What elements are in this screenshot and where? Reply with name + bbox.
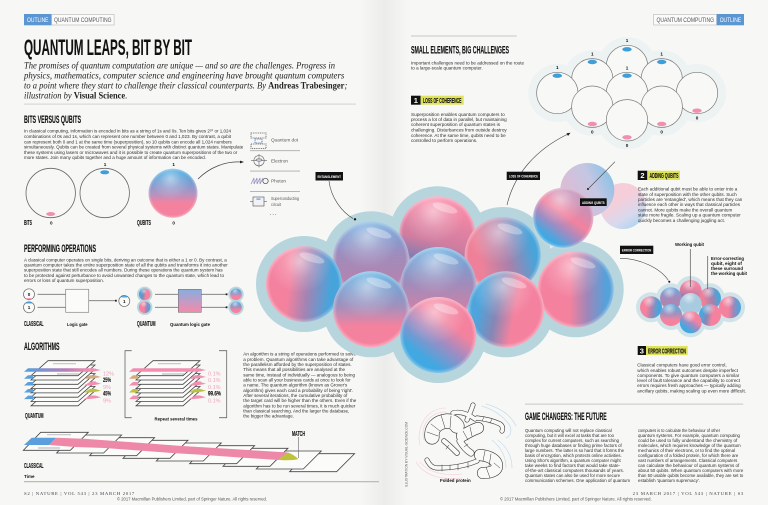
callout: entanglement: ENTANGLEMENT <box>318 174 341 179</box>
panel: algorithms <box>23 341 379 482</box>
label: match: MATCH <box>292 431 305 438</box>
column 2: molecules, which requires knowledge of the quantum <box>638 443 741 448</box>
icon: photon <box>251 178 268 184</box>
footer left: © 2017 Macmillan Publishers Limited, part of Springer Nature. All rights reserved. <box>117 496 267 502</box>
footer left: S2 | NATURE | VOL 543 | 23 MARCH 2017 <box>24 491 135 496</box>
repeated percentages: 0.1% <box>208 398 221 404</box>
folded protein illustration <box>416 404 516 479</box>
qubit sphere <box>148 162 198 226</box>
quantum stack of cards <box>24 361 101 406</box>
algorithm text: same time, instead of individually — analogous to being <box>243 372 355 377</box>
intro text: Important challenges need to be addressed on the route <box>411 60 524 65</box>
repeated percentages: 99.6% <box>208 392 222 398</box>
number badge 2 <box>638 171 680 180</box>
label: repeat several times: Repeat several times <box>154 416 198 422</box>
column 1: large numbers. The latter is so hard that it forms the <box>525 448 624 453</box>
repeated stack of cards <box>129 361 206 406</box>
arrow to qubit types <box>198 161 244 179</box>
label: folded protein: Folded protein <box>440 478 471 483</box>
number badge 1 <box>411 96 464 105</box>
section tag right <box>654 14 744 25</box>
qubit <box>266 246 342 322</box>
section tag left: QUANTUM COMPUTING <box>54 18 112 24</box>
label: logic gate: Logic gate <box>67 322 88 327</box>
quantum percentages: 25% <box>103 378 111 384</box>
label: bits: BITS <box>24 220 32 227</box>
body text: combinations of 0s and 1s, which can represent one number between 0 and 1,023. By contrast, a qubit <box>24 134 232 139</box>
label: working qubit: Working qubit <box>675 242 704 247</box>
qubit type list: circuit <box>271 202 282 207</box>
body text: In classical computing, information is encoded in bits as a string of 1s and 0s. Ten bits gives 2¹⁰ or 1,024 <box>24 129 231 134</box>
algorithm text: algorithm has to be run several times, it is much quicker <box>243 403 356 408</box>
state labels: 1 <box>556 65 559 70</box>
label: error-correcting qubit: these surround <box>711 266 743 271</box>
algorithm text: the bigger the advantage. <box>243 414 294 419</box>
label: quantum logic gate: Quantum logic gate <box>170 322 210 327</box>
standfirst: illustration by Visual Science. <box>24 92 127 102</box>
number badge 1: LOSS OF COHERENCE <box>423 98 462 105</box>
quantum percentages: 9% <box>103 385 111 391</box>
quantum percentages: 12% <box>103 372 114 378</box>
algorithm text: the parallelism afforded by the superposition of states. <box>243 362 352 367</box>
body text: Each additional qubit must be able to enter into a <box>638 187 738 192</box>
callout: adding qubits <box>580 162 615 206</box>
qubit type list: Electron <box>271 158 289 164</box>
segment lines <box>427 415 500 478</box>
qubit sphere: 1 <box>172 162 175 167</box>
panel: performing operations <box>24 243 244 328</box>
state labels: 0 <box>696 116 699 120</box>
body text <box>24 258 228 283</box>
body text: Classical computers have good error control, <box>637 363 727 368</box>
body text: more states. Join many qubits together and a huge amount of information can be encoded. <box>24 155 206 160</box>
qubit type list: Quantum dot <box>271 138 299 142</box>
classical logic gate diagram: 1 <box>28 305 31 310</box>
number badge 3: ERROR CORRECTION <box>648 348 686 355</box>
body text: simultaneously. Qubits can be created from several physical systems with distinct quantum states. Manipulate <box>24 145 244 150</box>
body text: these systems using lasers or microwaves and it is possible to create quantum superpositions of the two or <box>24 150 238 155</box>
column 1 <box>525 428 630 483</box>
algorithm text: a problem. Quantum algorithms can take advantage of <box>243 357 354 362</box>
section tag right: OUTLINE <box>720 18 741 24</box>
number badge 2: 2 <box>640 171 645 180</box>
body text: A classical computer operates on single bits, deriving an outcome that is either a 1 or 0. By contrast, a <box>24 258 227 262</box>
classical logic gate diagram: 0 <box>28 292 31 297</box>
state labels: 0 <box>626 143 629 148</box>
label: error-correcting qubit: the working qubit <box>711 271 747 276</box>
qubit <box>333 221 409 297</box>
number badge 3 <box>638 346 688 355</box>
label: error-correcting qubit: qubit, eight of <box>711 261 742 266</box>
label: error-correcting qubit: Error-correcting <box>711 256 744 261</box>
number badge 3: 3 <box>640 346 644 355</box>
body text: superposition state that still encodes all numbers. During these operations the quantum system has <box>24 268 223 273</box>
icon: quantum dot <box>251 133 266 148</box>
column 2: quantum systems. For example, quantum computing <box>638 433 740 438</box>
body text <box>24 129 244 160</box>
title: QUANTUM LEAPS, BIT BY BIT <box>24 35 192 60</box>
bit state 1 <box>80 162 129 218</box>
panel: bits versus qubits: BITS VERSUS QUBITS <box>24 114 81 126</box>
repeated percentages <box>208 372 222 404</box>
column 1: Using Shor's algorithm, a quantum computer might <box>525 458 621 463</box>
section tag right: QUANTUM COMPUTING <box>656 18 714 24</box>
qubit <box>538 251 614 327</box>
body text: challenging. Disturbances from outside destroy <box>411 128 507 133</box>
qubit type list: ... <box>270 211 277 216</box>
state labels: 0 <box>591 130 594 134</box>
bit state 1: 1 <box>104 162 107 167</box>
halo <box>636 276 745 337</box>
state labels: 1 <box>626 38 629 43</box>
body text: process a lot of data in parallel, but maintaining <box>411 117 507 122</box>
body text <box>638 187 743 223</box>
classical logic gate diagram: 1 <box>123 299 126 304</box>
standfirst <box>23 60 347 102</box>
footer right: 23 MARCH 2017 | VOL 543 | NATURE | S3 <box>633 491 744 496</box>
body text: state of superposition with the other qubits. Such <box>638 192 737 197</box>
central qubit cluster <box>256 163 646 383</box>
repeated percentages: 0.1% <box>208 378 221 384</box>
column 2: about 50 qubits. When quantum computers with more <box>638 468 744 473</box>
panel: performing operations: CLASSICAL <box>24 321 44 328</box>
body text: influence each other in ways that classical particles <box>638 202 741 207</box>
column 1: complex for current computers, such as searching <box>525 438 619 443</box>
footer right <box>500 491 744 502</box>
algorithm text: a name. The quantum algorithm (known as Grover's <box>243 383 348 388</box>
qubit <box>465 217 541 293</box>
label: quantum: QUANTUM <box>137 321 156 328</box>
qubit type list: Photon <box>271 178 287 184</box>
column 2: mechanics of their electrons, or to find the optimal <box>638 448 735 453</box>
quantum percentages: 9% <box>103 398 111 404</box>
column 1: through huge databases or finding prime factors of <box>525 443 622 448</box>
mini qubits <box>640 280 741 333</box>
label: error-correcting qubit <box>711 256 747 276</box>
body text: coherent superposition of quantum states is <box>411 122 501 127</box>
backbone outer <box>427 405 503 473</box>
body text: state more fragile. Scaling up a quantum computer <box>638 213 741 218</box>
body text: ancillary qubits, making scaling up even more difficult. <box>637 388 746 393</box>
column 2: than 50 usable qubits become available, they are set to <box>638 473 744 478</box>
algorithm text: able to scan all your business cards at once to look for <box>243 378 351 382</box>
repeated percentages: 0.1% <box>208 385 221 391</box>
body text: particles are 'entangled', which means that they can <box>638 197 743 202</box>
qubit type list <box>250 133 300 216</box>
panel: adding qubits <box>638 171 743 223</box>
panel: loss of coherence <box>411 96 507 143</box>
number badge 1: 1 <box>414 96 418 105</box>
label: qubits: QUBITS <box>137 220 151 227</box>
state labels: 1 <box>626 66 629 70</box>
classical search strip <box>23 432 355 472</box>
qubit <box>399 196 475 272</box>
ghost outlines <box>416 404 516 479</box>
quantum percentages <box>103 372 114 404</box>
halo <box>256 186 624 383</box>
faded qubits <box>560 163 646 229</box>
backbone inner <box>427 405 503 473</box>
body text: cannot. More qubits make the overall quantum <box>638 207 732 212</box>
algorithm text: algorithm) gives each card a probability of being 'right'. <box>243 388 353 393</box>
state labels <box>556 38 699 148</box>
standfirst: physics, mathematics, computer science and engineering have brought quantum computers <box>23 72 345 82</box>
panel: game changers <box>525 404 744 483</box>
qubit sphere: 0 <box>172 220 175 226</box>
footer right: © 2017 Macmillan Publishers Limited, part of Springer Nature. All rights reserved. <box>500 496 652 502</box>
column 2: can calculate the behaviour of quantum systems of <box>638 463 740 468</box>
column 2: computers is to calculate the behaviour of other <box>638 428 720 433</box>
column 1: Quantum states can also be used for more secure <box>525 473 620 478</box>
body text: Superposition enables quantum computers to <box>411 112 505 117</box>
footer left <box>24 491 267 502</box>
qubit type list: Superconducting <box>271 196 299 201</box>
column 2: configuration of a folded protein, for which there are <box>638 453 739 458</box>
qubit circles <box>537 45 718 141</box>
callout: entanglement <box>316 172 356 220</box>
algorithm text: An algorithm is a string of operations performed to solve <box>243 352 356 357</box>
algorithm text <box>243 352 357 419</box>
body text: errors requires fresh approaches — typically adding <box>637 383 741 388</box>
callout: loss of coherence: LOSS OF COHERENCE <box>509 174 538 179</box>
body text: to be protected against perturbance to avoid unwanted changes to the quantum state, which lead to <box>24 273 224 278</box>
panel: small elements intro: SMALL ELEMENTS, BIG CHALLENGES <box>411 44 509 56</box>
qubit <box>333 271 409 347</box>
panel: performing operations: PERFORMING OPERATIONS <box>24 243 96 255</box>
bracket: repeat <box>125 351 227 418</box>
state labels: 0 <box>660 130 663 134</box>
qubit <box>468 271 544 347</box>
body text: components. To give quantum computers a similar <box>637 373 740 378</box>
qubit <box>400 247 476 323</box>
body text: controlled to perform operations. <box>411 138 477 143</box>
column 1: computing, but it will excel at tasks that are too <box>525 433 614 438</box>
panel: small elements intro <box>411 36 524 70</box>
body text: quickly becomes a challenging juggling act. <box>638 218 725 223</box>
state labels: 1 <box>591 52 594 56</box>
body text <box>637 363 746 393</box>
section tag left <box>24 14 114 25</box>
callout: adding qubits: ADDING QUBITS <box>582 200 605 205</box>
callout: error correction <box>620 246 670 283</box>
callout: loss of coherence <box>507 133 570 205</box>
algorithm text: This means that all possibilities are analysed at the <box>243 367 345 372</box>
standfirst: The promises of quantum computation are unique — and so are the challenges. Progress in <box>24 60 335 72</box>
section tag left: OUTLINE <box>27 18 48 24</box>
number badge 2: ADDING QUBITS <box>650 173 679 180</box>
column 1: basis of encryption, which protects online activities. <box>525 453 622 458</box>
callout: error correction: ERROR CORRECTION <box>622 248 651 253</box>
body text: errors or loss of quantum superposition. <box>24 278 104 283</box>
label: time: Time <box>24 474 35 479</box>
panel: bits versus qubits <box>24 114 300 227</box>
intro text: to a large-scale quantum computer. <box>411 65 483 70</box>
illustration credit: ILLUSTRATION BY VISUAL-SCIENCE.COM <box>404 422 408 487</box>
body text: can represent both 0 and 1 at the same time (superposition), so 10 qubits can encode all 1,024 numbers <box>24 139 232 144</box>
column 2: establish 'quantum supremacy'. <box>638 478 700 483</box>
column 1: take weeks to find factors that would take state- <box>525 463 620 468</box>
qubit array diagram <box>528 37 726 149</box>
panel: error correction <box>637 346 746 393</box>
panel: algorithms: ALGORITHMS <box>24 341 60 353</box>
body text: coherence. At the same time, qubits need to be <box>411 133 506 138</box>
icon: superconducting circuit <box>250 197 267 206</box>
column 1: communication schemes. One application of quantum <box>525 478 630 483</box>
column 1: of-the-art classical computers thousands of years. <box>525 468 624 473</box>
quantum logic gate diagram <box>137 287 244 315</box>
qubit <box>400 297 476 373</box>
panel: algorithms: CLASSICAL <box>24 463 44 470</box>
bit state 0: 0 <box>50 220 53 226</box>
body text: quantum computer takes the entire superposition state of all the qubits and transforms it into another <box>24 263 228 268</box>
body text: level of fault tolerance and the capability to correct <box>637 378 741 383</box>
algorithm text: than classical searching. And the larger the database, <box>243 408 349 414</box>
column 1: Quantum computing will not replace classical <box>525 428 612 433</box>
state labels: 1 <box>660 52 663 56</box>
classical logic gate diagram <box>24 289 130 313</box>
algorithm text: the target card will be higher than the others. Even if the <box>243 398 357 403</box>
standfirst: to a point where they start to challenge their classical counterparts. By Andreas Trabesinger; <box>24 82 347 92</box>
body text <box>411 112 507 143</box>
icon: electron <box>251 154 267 168</box>
halo <box>528 37 726 149</box>
panel: game changers: GAME CHANGERS: THE FUTURE <box>525 411 607 423</box>
repeated percentages: 0.1% <box>208 372 221 378</box>
error correction diagram <box>636 242 747 337</box>
quantum percentages: 45% <box>103 392 111 398</box>
column 2: vast numbers of arrangements. Classical computers <box>638 458 738 463</box>
bit state 0 <box>26 168 75 226</box>
algorithm text: After several iterations, the cumulative probability of <box>243 393 348 398</box>
column 2: could be used to fully understand the chemistry of <box>638 438 738 443</box>
qubit: adding qubits <box>532 188 593 250</box>
label: quantum: QUANTUM <box>25 413 44 420</box>
column 2 <box>638 428 744 483</box>
body text: which enables robust outcomes despite imperfect <box>637 368 739 373</box>
intro text <box>411 60 524 70</box>
